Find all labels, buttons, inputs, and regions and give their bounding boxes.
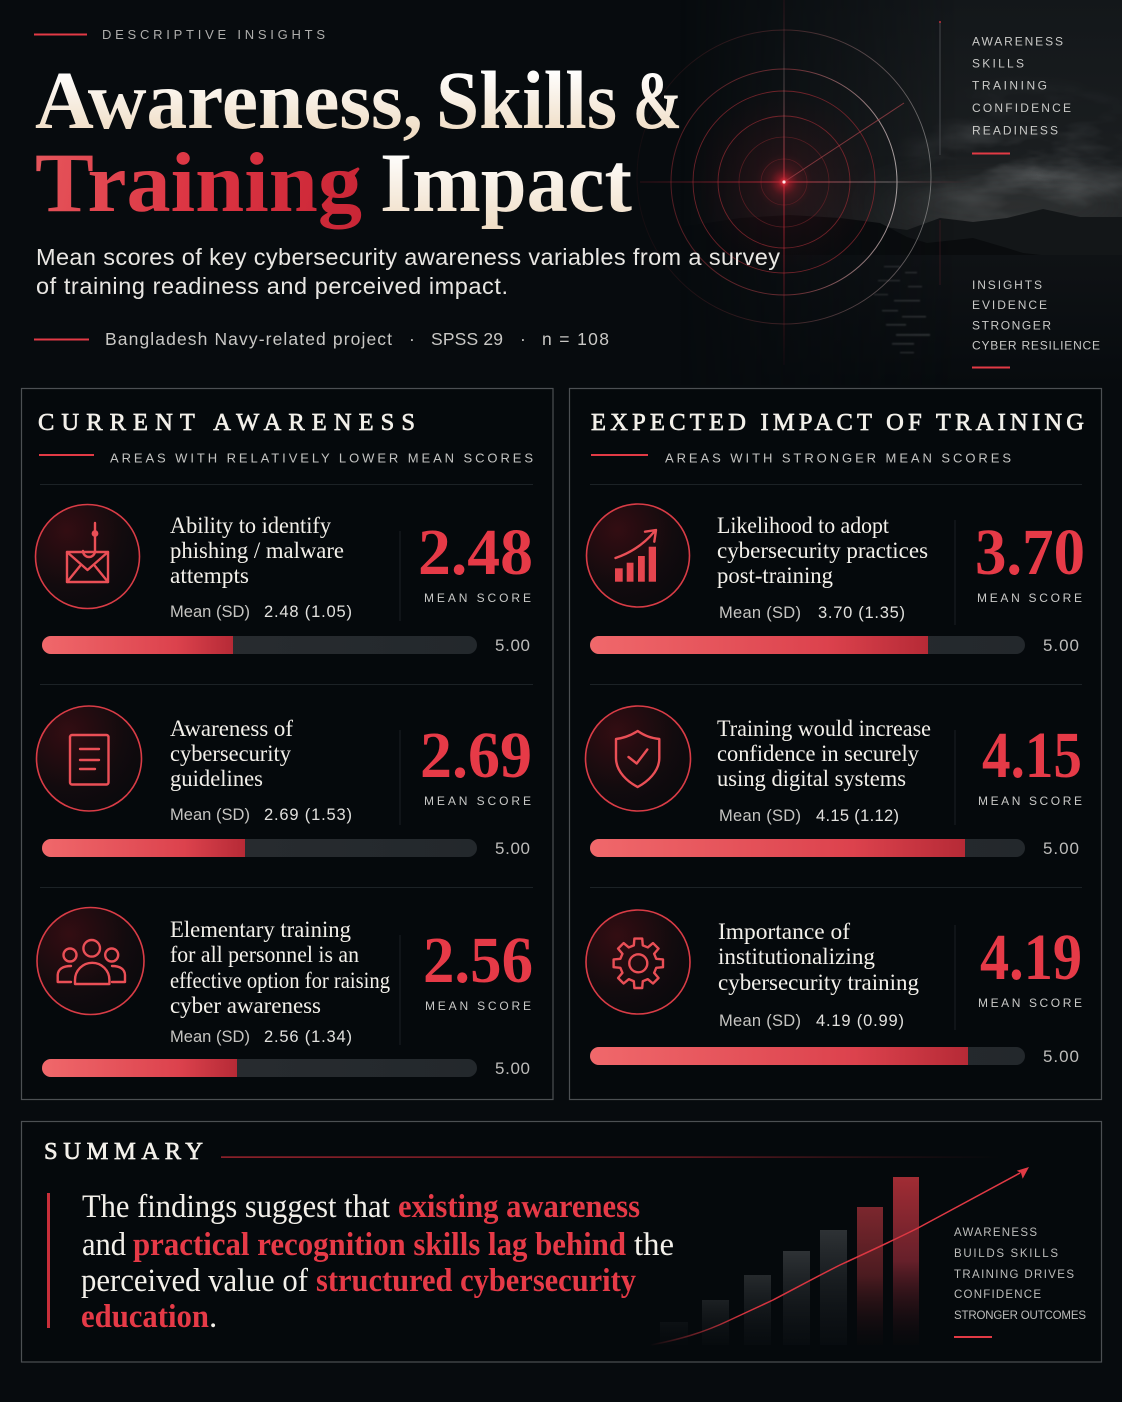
radar target graphic (637, 0, 970, 365)
progress bar (590, 1047, 1079, 1066)
item text (718, 919, 919, 995)
item text: Importance of (718, 919, 850, 944)
hero keywords top: TRAINING (972, 78, 1047, 92)
project metadata: · (520, 329, 526, 349)
mean and sd: 4.19 (0.99) (816, 1012, 904, 1030)
score 2.56: 2.56 (423, 924, 533, 997)
mean and sd: 4.15 (1.12) (816, 807, 899, 825)
mean and sd: 3.70 (1.35) (818, 604, 905, 622)
summary text: structured cybersecurity (316, 1263, 636, 1299)
summary text: education (81, 1299, 209, 1335)
item text: cybersecurity training (718, 970, 919, 995)
mean and sd: Mean (SD) (170, 603, 250, 621)
item text: Training would increase (717, 716, 931, 741)
metric: phishing identification 2.48 (36, 504, 533, 655)
summary keywords: CONFIDENCE (954, 1289, 1041, 1301)
score 4.19: 4.19 (980, 921, 1082, 994)
item text: phishing / malware (170, 538, 344, 563)
metric: confidence 4.15 (586, 706, 1082, 858)
summary text: and (82, 1227, 126, 1263)
title (35, 54, 682, 230)
item text (170, 716, 293, 791)
mean and sd: 2.56 (1.34) (264, 1028, 352, 1046)
project metadata (34, 329, 609, 349)
icon: document (36, 706, 142, 811)
hero keywords top: SKILLS (972, 56, 1024, 70)
progress bar (42, 1059, 530, 1078)
summary text: . (209, 1299, 217, 1335)
item text: using digital systems (717, 766, 906, 791)
hero keywords bottom: INSIGHTS (972, 278, 1042, 292)
hero keywords top: CONFIDENCE (972, 101, 1071, 115)
score 2.69: MEAN SCORE (424, 794, 531, 808)
mean and sd: Mean (SD) (170, 806, 250, 824)
progress bar: 5.00 (495, 1059, 530, 1078)
item text: attempts (170, 563, 249, 588)
progress bar: 5.00 (1043, 636, 1079, 655)
mean and sd: Mean (SD) (719, 807, 801, 825)
icon: shield check (586, 706, 690, 811)
panel: summary (22, 1122, 1102, 1362)
project metadata: Bangladesh Navy-related project (105, 329, 392, 349)
summary keywords: AWARENESS (954, 1227, 1037, 1239)
summary keywords: STRONGER OUTCOMES (954, 1310, 1086, 1322)
vertical hero rule (939, 21, 941, 285)
summary keywords: BUILDS SKILLS (954, 1248, 1058, 1260)
score 3.70: 3.70 (975, 516, 1085, 589)
heading: current awareness: CURRENT AWARENESS (38, 409, 415, 436)
score 2.48: MEAN SCORE (424, 591, 531, 605)
item text (717, 716, 931, 791)
progress bar (590, 636, 1079, 655)
summary keywords (954, 1227, 1086, 1338)
icon: growth chart (586, 504, 690, 607)
item text: effective option for raising (170, 968, 390, 993)
hero landscape photo (779, 0, 1122, 354)
icon: gear (586, 910, 690, 1014)
subtitle: Mean scores of key cybersecurity awareness variables from a survey (36, 244, 780, 270)
hero keywords top: READINESS (972, 124, 1058, 138)
metric: guidelines awareness 2.69 (36, 706, 532, 858)
item text: cyber awareness (170, 993, 321, 1018)
summary text: practical recognition skills lag behind (133, 1227, 626, 1263)
item text: Elementary training (170, 917, 351, 942)
mean and sd (719, 1012, 904, 1030)
title: Skills (436, 54, 617, 146)
mean and sd (170, 1028, 352, 1046)
item text: guidelines (170, 766, 263, 791)
subtitle: of training readiness and perceived impact. (36, 273, 508, 299)
progress bar (42, 839, 530, 858)
metric: elementary training 2.56 (37, 908, 533, 1078)
score 2.69: 2.69 (420, 719, 532, 792)
summary text: perceived value of (81, 1263, 308, 1299)
title: Impact (380, 136, 632, 230)
project metadata: SPSS 29 (431, 329, 503, 349)
hero keywords top (972, 34, 1071, 154)
item text: Likelihood to adopt (717, 513, 890, 538)
hero keywords top: AWARENESS (972, 34, 1063, 48)
progress bar: 5.00 (495, 636, 530, 655)
item text: confidence in securely (717, 741, 919, 766)
mean and sd: 2.69 (1.53) (264, 806, 352, 824)
summary text: existing awareness (398, 1189, 640, 1225)
subheading: lower mean scores: AREAS WITH RELATIVELY LOWER MEAN SCORES (110, 450, 533, 466)
item text: Awareness of (170, 716, 293, 741)
mean and sd: 2.48 (1.05) (264, 603, 352, 621)
score 3.70: MEAN SCORE (977, 591, 1082, 605)
progress bar: 5.00 (1043, 1047, 1079, 1066)
item text: cybersecurity practices (717, 538, 928, 563)
summary accent bar (47, 1193, 50, 1328)
score 4.15: MEAN SCORE (978, 794, 1082, 808)
progress bar: 5.00 (495, 839, 530, 858)
mean and sd: Mean (SD) (170, 1028, 250, 1046)
title: Training (35, 136, 362, 230)
item text (717, 513, 928, 588)
icon: people (37, 908, 144, 1014)
summary text (81, 1189, 674, 1335)
panel: expected impact of training (570, 388, 1102, 1100)
score 2.56: MEAN SCORE (425, 999, 531, 1013)
summary text: The findings suggest that (82, 1189, 390, 1225)
project metadata: · (409, 329, 415, 349)
progress bar: 5.00 (1043, 839, 1079, 858)
panel: current awareness (22, 388, 553, 1100)
mean and sd (170, 603, 352, 621)
progress bar (590, 839, 1079, 858)
icon: phishing envelope (36, 504, 140, 608)
mean and sd (170, 806, 352, 824)
hero keywords bottom: CYBER RESILIENCE (972, 338, 1100, 352)
summary keywords: TRAINING DRIVES (954, 1269, 1074, 1281)
heading: summary: SUMMARY (44, 1138, 203, 1165)
eyebrow: DESCRIPTIVE INSIGHTS (102, 27, 325, 42)
item text: Ability to identify (170, 513, 331, 538)
summary text: the (634, 1227, 674, 1263)
item text: for all personnel is an (170, 942, 359, 967)
item text: institutionalizing (718, 944, 875, 969)
item text: post-training (717, 563, 833, 588)
score 2.48: 2.48 (418, 516, 533, 589)
title: & (633, 54, 682, 146)
item text (170, 513, 344, 588)
progress bar (42, 636, 530, 655)
score 4.15: 4.15 (982, 719, 1082, 792)
subtitle (36, 244, 780, 299)
mean and sd (719, 807, 899, 825)
item text (170, 917, 390, 1018)
hero keywords bottom: EVIDENCE (972, 298, 1047, 312)
subheading: stronger mean scores: AREAS WITH STRONGER MEAN SCORES (665, 450, 1011, 466)
item text: cybersecurity (170, 741, 291, 766)
mean and sd: Mean (SD) (719, 604, 801, 622)
score 4.19: MEAN SCORE (978, 996, 1082, 1010)
mean and sd: Mean (SD) (719, 1012, 801, 1030)
metric: adopt practices 3.70 (586, 504, 1085, 655)
mean and sd (719, 604, 905, 622)
hero keywords bottom: STRONGER (972, 318, 1051, 332)
title: Awareness, (35, 54, 423, 146)
hero keywords bottom (972, 278, 1100, 368)
bar chart with rising arrow (640, 1167, 1029, 1347)
metric: institutionalizing 4.19 (586, 910, 1082, 1066)
project metadata: n = 108 (542, 329, 609, 349)
heading: expected impact: EXPECTED IMPACT OF TRAINING (591, 409, 1084, 436)
